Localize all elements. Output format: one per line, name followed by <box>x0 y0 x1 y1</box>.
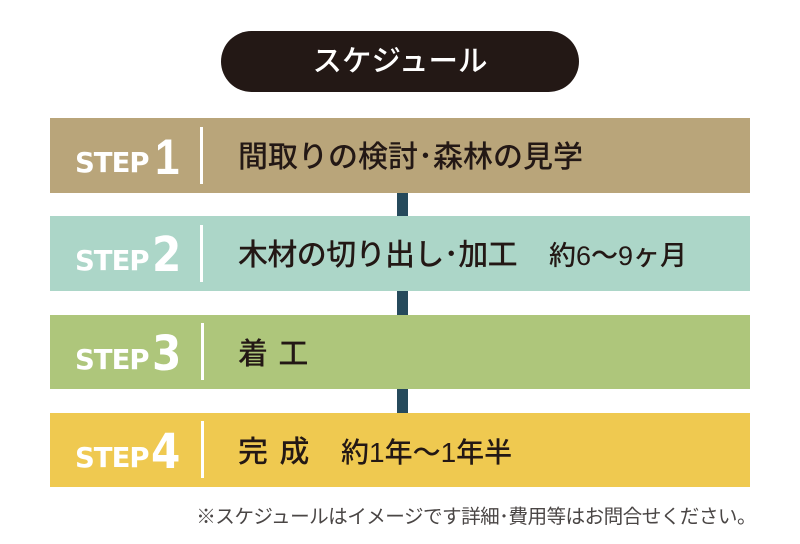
step 1 label: STEP <box>75 147 149 179</box>
step 4 number: 4 <box>151 424 180 480</box>
footnote: ※スケジュールはイメージです詳細･費用等はお問合せください。 <box>196 506 756 528</box>
step 3 label: STEP <box>75 344 149 376</box>
step 4 duration: 約1年～1年半 <box>341 437 512 468</box>
step 1 number: 1 <box>155 129 179 185</box>
title pill <box>221 31 579 92</box>
step 3 number: 3 <box>152 326 181 382</box>
title pill: スケジュール <box>313 45 487 78</box>
connector: step 2 to 3 <box>397 290 408 315</box>
step 2 label: STEP <box>75 245 149 277</box>
step 2 text: 木材の切り出し･加工 <box>238 239 517 272</box>
panel: step 4 <box>50 413 750 487</box>
step 3 text: 着 工 <box>238 338 309 371</box>
step 2 divider <box>200 225 203 282</box>
connector: step 1 to 2 <box>397 192 408 217</box>
step 2 duration: 約6～9ヶ月 <box>549 241 687 271</box>
step 2 number: 2 <box>152 227 181 283</box>
connector: step 3 to 4 <box>397 388 408 413</box>
step 3 divider <box>201 323 204 380</box>
panel: step 3 <box>50 315 750 389</box>
step 1 text: 間取りの検討･森林の見学 <box>238 141 583 174</box>
panel: step 2 <box>50 216 750 291</box>
panel: step 1 <box>50 118 750 193</box>
step 4 divider <box>201 421 204 478</box>
step 4 label: STEP <box>75 442 149 474</box>
step 4 text: 完 成 <box>238 436 311 469</box>
step 1 divider <box>200 127 203 184</box>
